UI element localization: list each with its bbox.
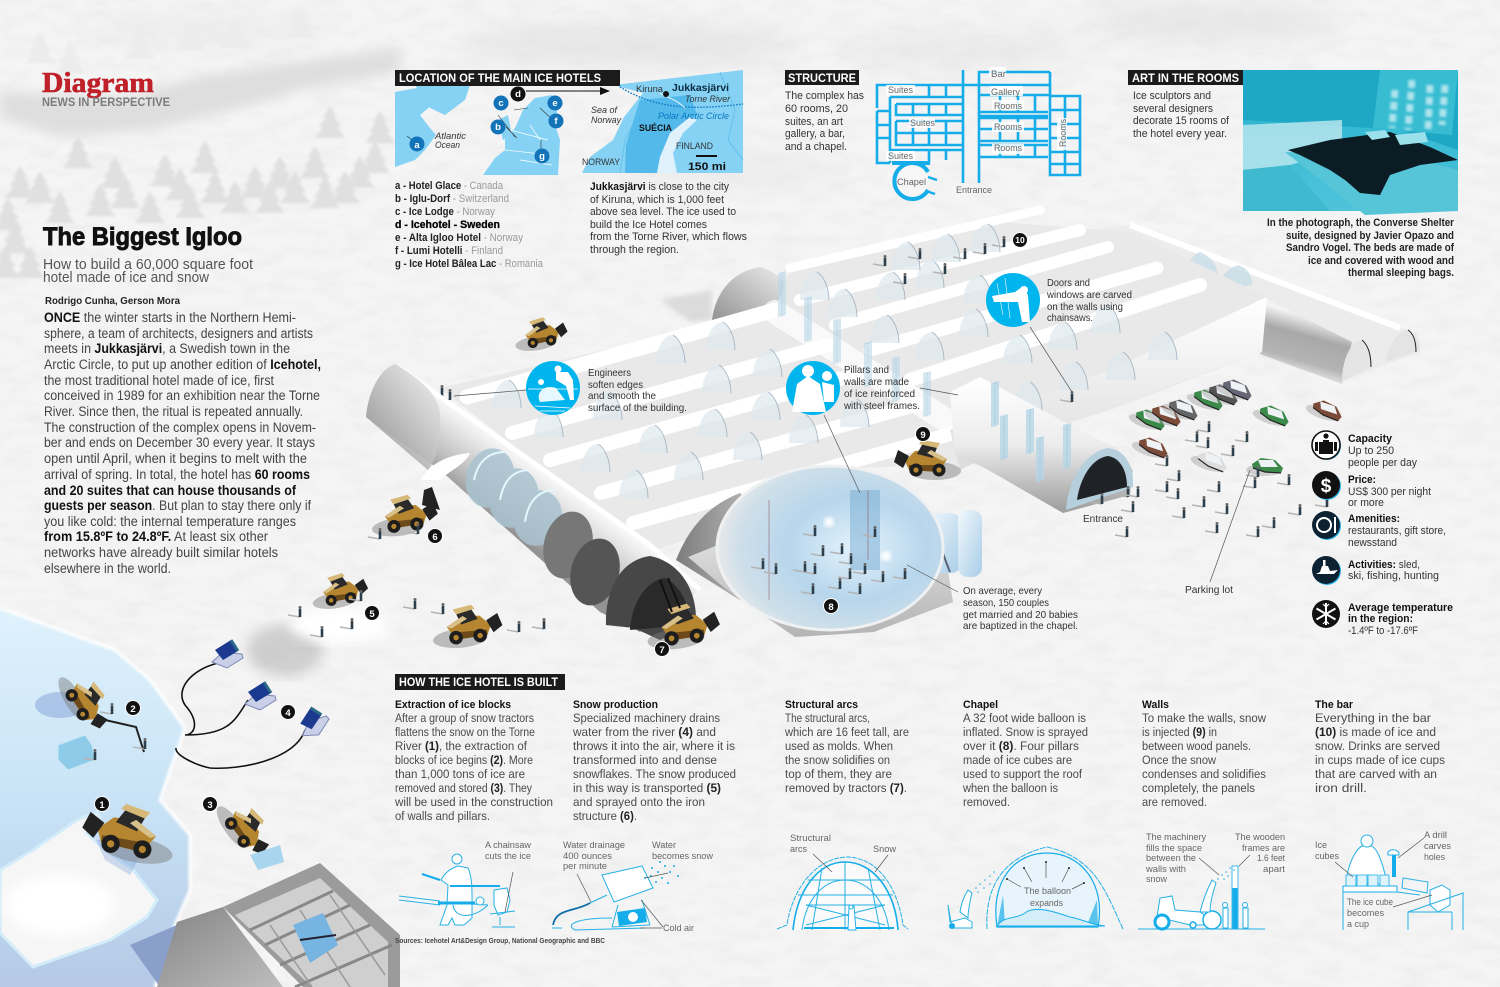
heading: the biggest igloo [43,223,253,307]
column: snow production: water from the river (4) and [572,725,716,739]
drawing: chainsaw cutting ice: cuts the ice [485,851,531,861]
callout: engineers: Engineers [588,368,631,379]
column: extraction: Extraction of ice blocks [395,699,511,711]
drawing: wall machinery: 1.6 feet [1257,853,1285,863]
text block: intro article: guests per season. But plan to stay there only if [44,498,311,513]
column: snow production: throws it into the air, where it is [573,739,735,753]
floor plan: Suites [888,151,913,161]
panel: art in the rooms [1128,70,1458,279]
column: chapel: inflated. Snow is sprayed [963,725,1088,739]
text: price [1348,474,1432,509]
drawing: wall machinery: snow [1146,874,1167,884]
text: price: Price: [1348,474,1376,486]
text: temperature: -1.4ºF to -17.6ºF [1348,625,1418,637]
callout: engineers: surface of the building. [588,403,687,414]
sources: Sources: Icehotel Art&Design Group, National Geographic and BBC [395,936,605,945]
heading: the biggest igloo: The Biggest Igloo [43,223,242,251]
text: capacity [1348,433,1417,469]
text block: intro article: from 15.8ºF to 24.8ºF. At least six other [44,529,269,544]
callout: chapel [963,586,1078,632]
map: scandinavia: NORWAY [582,156,621,167]
map: scandinavia: Sea of [591,104,618,115]
text block: jukkasjarvi: from the Torne River, which flows [590,231,747,243]
map: location markers [410,86,610,164]
drawing: snow cannon: Water [652,840,676,850]
icon: amenities [1312,511,1341,540]
column: chapel: when the balloon is [962,781,1058,795]
photo caption: thermal sleeping bags. [1348,267,1454,279]
drawing: structural arcs [777,833,908,930]
number badges: 10 [1015,235,1025,245]
column: walls: To make the walls, snow [1142,711,1266,725]
ice block pit [157,863,400,987]
drawing: ice bar [1315,830,1463,930]
map: scandinavia: Kiruna [636,83,664,94]
drawing: ice bar: A drill [1424,830,1447,840]
number badges: 7 [659,645,665,656]
drawing: ice bar: carves [1424,841,1451,851]
panel: how the ice hotel is built [394,674,1463,945]
map: location markers: g [539,151,545,162]
column: chapel: Chapel [963,699,998,711]
photo caption [1267,217,1455,279]
building: entrance tunnel [950,377,1133,513]
text block: intro article: ber and ends on December 30 every year. It stays [44,435,315,450]
heading: location: LOCATION OF THE MAIN ICE HOTELS [399,71,601,85]
callout: pillars [786,361,920,415]
panel: structure [785,67,1080,199]
column: snow production: transformed into and dense [573,753,717,767]
text block: structure: and a chapel. [785,141,847,153]
map: location markers: b [495,122,501,133]
callout: engineers [526,361,687,415]
label: entrance: Entrance [1083,514,1123,525]
floor plan: Bar [991,69,1006,79]
drawing: wall machinery: fills the space [1146,843,1202,853]
drawing: ice bar: becomes [1347,908,1384,918]
text block: intro article: you like cold: the internal temperature ranges [44,514,296,529]
callout: doors and windows [986,273,1132,327]
panel: location map: Ocean [435,139,460,150]
drawing: structural arcs: Snow [873,844,896,854]
snow mound shading [247,607,390,676]
column: structural arcs: the snow solidifies on [785,753,890,767]
callout: chapel: On average, every [963,586,1043,597]
column: structural arcs: removed by tractors (7). [785,781,907,795]
legend: ice hotels list: a - Hotel Glace - Canada [395,180,503,192]
text block: structure: gallery, a bar, [785,128,845,140]
heading: art: ART IN THE ROOMS [1132,71,1239,85]
drawing: snow cannon: 400 ounces [563,851,612,861]
callout: doors and windows: Doors and [1047,278,1090,289]
room arches [430,224,1177,498]
drawing: ice bar: holes [1424,852,1445,862]
number badges: 3 [207,800,213,811]
icon: temperature [1312,600,1340,628]
text block: art: the hotel every year. [1133,128,1227,140]
callout: pillars: of ice reinforced [844,389,915,400]
drawing: wall machinery: frames are [1242,843,1285,853]
text block: structure: The complex has [785,90,864,102]
heading: the biggest igloo: How to build a 60,000 square foot [43,257,253,273]
floor plan: Suites [888,85,913,95]
drawing: balloon chapel [948,847,1123,929]
text: activities [1348,559,1439,582]
text block: intro article: elsewhere in the world. [44,561,171,576]
parking lot with cars [1127,375,1345,476]
callout: chapel: get married and 20 babies [963,610,1078,621]
text block: jukkasjarvi: above sea level. The ice used to [590,206,736,218]
column: snow production: and sprayed onto the iron [573,795,705,809]
text: activities: ski, fishing, hunting [1348,570,1439,582]
drawing: wall machinery [1138,832,1285,929]
floor plan: Rooms [1058,119,1068,147]
drawing: wall machinery: The wooden [1235,832,1285,842]
drawing: structural arcs: Structural [790,833,831,843]
heading: how it is built: HOW THE ICE HOTEL IS BUILT [399,675,559,689]
column: the bar: Everything in the bar [1315,711,1431,725]
column: walls: between wood panels. [1142,739,1251,753]
drawing: snow cannon: per minute [563,861,607,871]
title: Diagram: NEWS IN PERSPECTIVE [42,96,170,109]
map: scandinavia: Polar Arctic Circle [658,110,729,121]
column: snow production [572,699,736,823]
drawing: ice bar: Ice [1315,840,1327,850]
heading: the biggest igloo: hotel made of ice and snow [43,270,209,286]
callout: pillars: with steel frames. [843,401,920,412]
column: snow production: Specialized machinery drains [573,711,720,725]
text block: jukkasjarvi: through the region. [590,244,679,256]
map: scandinavia: Torne River [685,93,731,104]
heading: structure: STRUCTURE [788,71,856,85]
photo caption: ice and covered with wood and [1308,255,1454,267]
building: rear right wing [1075,225,1420,384]
tractors near tunnel [288,314,570,650]
drawing: balloon chapel: expands [1030,898,1063,908]
heading: the biggest igloo: Rodrigo Cunha, Gerson Mora [45,295,180,307]
legend: ice hotels list [395,180,543,270]
drawing: wall machinery: apart [1263,864,1285,874]
callout lines [454,327,1250,592]
ice island [0,812,157,967]
text block: structure [785,90,864,153]
legend: ice hotels list: e - Alta Igloo Hotel - Norway [395,232,524,244]
map: location markers: c [498,98,504,109]
drawing: balloon chapel: The balloon [1024,886,1071,896]
column: extraction: flattens the snow on the Torne [395,725,535,739]
column: the bar: in cups made of ice cups [1315,753,1445,767]
column: chapel: used to support the roof [963,767,1083,781]
map: scandinavia: 150 mi [688,161,726,173]
text block: intro article: conceived in 1989 for an exhibition near the Torne [44,388,320,403]
number badges: 5 [369,609,375,620]
column: extraction: will be used in the construction [394,795,553,809]
text block: structure: 60 rooms, 20 [785,103,848,115]
building: chapel dome [676,466,982,637]
drawing: ice bar: a cup [1347,919,1369,929]
column: extraction: of walls and pillars. [395,809,490,823]
dome pods [925,510,982,577]
tractors at river [35,663,284,870]
column: snow production: structure (6). [573,809,637,823]
legend: ice hotels list: b - Iglu-Dorf - Switzerland [395,193,509,205]
column: extraction: than 1,000 tons of ice are [395,767,525,781]
drawing: wall machinery: The machinery [1146,832,1206,842]
drawing: snow cannon [552,840,713,933]
column: walls: condenses and solidifies [1142,767,1266,781]
map: location markers: d [515,89,521,100]
panel: location map [395,70,743,175]
column: structural arcs: used as molds. When [785,739,893,753]
drawing: chainsaw cutting ice: A chainsaw [485,840,531,850]
floor plan: Chapel [897,177,926,187]
drawing: ice bar: cubes [1315,851,1339,861]
callout: doors and windows: on the walls using [1047,302,1123,313]
floor plan: Rooms [994,122,1022,132]
text block: intro article: Arctic Circle, to put up another edition of Icehotel, [44,357,321,372]
column: chapel: removed. [963,795,1010,809]
number badges: 2 [130,704,136,715]
text: amenities [1348,513,1446,549]
photo: ice suite [1243,70,1458,215]
callout: chapel: are baptized in the chapel. [963,621,1078,632]
drawing: wall machinery: between the [1146,853,1196,863]
drawing: chainsaw cutting ice [399,840,531,927]
column: walls: Walls [1142,699,1169,711]
building: rear barrel cap [660,267,790,325]
map: location markers: f [554,116,558,127]
drawing: snow cannon: Cold air [663,923,694,933]
text block: intro article: open until April, when it begins to melt with the [44,451,307,466]
text block: art: decorate 15 rooms of [1133,115,1230,127]
river water [0,608,190,987]
callout: engineers: soften edges [588,380,643,391]
text block: intro article [44,310,321,576]
text block: intro article: ONCE the winter starts in the Northern Hemi- [44,310,296,325]
map: scandinavia: Norway [591,114,622,125]
column: extraction: removed and stored (3). They [395,781,533,795]
column: the bar: (10) is made of ice and [1315,725,1436,739]
column: walls: are removed. [1142,795,1207,809]
text block: art [1133,90,1230,140]
map: scandinavia: FINLAND [676,140,713,151]
chapel ring [892,163,937,199]
panel: location map: Atlantic [434,130,466,141]
callout: doors and windows: windows are carved [1046,290,1132,301]
title: Diagram [42,68,170,109]
photo caption: suite, designed by Javier Opazo and [1286,230,1454,242]
column: walls: completely, the panels [1142,781,1255,795]
floor plan [877,67,1080,199]
map: connectors [407,103,563,154]
label: parking lot: Parking lot [1185,585,1233,596]
text: capacity: Up to 250 [1348,445,1394,457]
column: chapel: over it (8). Four pillars [963,739,1079,753]
background: foggy forest [0,6,1340,278]
column: structural arcs: Structural arcs [785,699,858,711]
drawing: snow cannon: Water drainage [563,840,625,850]
number badges: 9 [920,430,926,441]
column: the bar: that are carved with an [1315,767,1437,781]
text: amenities: newsstand [1348,537,1397,549]
text: activities: Activities: sled, [1348,559,1420,571]
map: scandinavia: SUÉCIA [639,123,672,133]
text block: jukkasjarvi: Jukkasjärvi is close to the city [590,181,729,193]
text: price: or more [1348,497,1384,509]
text block: jukkasjarvi: build the Ice Hotel comes [590,219,707,231]
text block: intro article: River. Since then, the ritual is repeated annually. [44,404,303,419]
column: the bar: iron drill. [1315,781,1367,795]
floor plan: Rooms [994,143,1022,153]
floor plan: Suites [910,118,935,128]
text: temperature: Average temperature [1348,602,1453,614]
column: extraction: River (1), the extraction of [395,739,528,753]
column: the bar [1315,699,1445,795]
photo caption: In the photograph, the Converse Shelter [1267,217,1455,229]
text block: intro article: The construction of the complex opens in Novem- [44,420,316,435]
icon: price: $ [1321,476,1332,497]
number badges: 1 [99,800,105,811]
text: capacity: Capacity [1348,433,1392,445]
text block: intro article: arrival of spring. In total, the hotel has 60 rooms [44,467,310,482]
number badges: 4 [285,708,291,719]
text block: art: several designers [1133,103,1213,115]
map: scandinavia: Jukkasjärvi [672,82,729,94]
icon: price [1312,471,1341,500]
callout: pillars: Pillars and [844,365,889,376]
drawing: wall machinery: walls with [1145,864,1186,874]
title: Diagram: Diagram [42,68,154,99]
column: snow production: snowflakes. The snow produced [573,767,736,781]
column: walls: Once the snow [1142,753,1216,767]
column: snow production: in this way is transported (5) [573,781,721,795]
building: main roof with room barrels [440,210,1267,552]
text block: intro article: and 20 suites that can house thousands of [44,483,296,498]
text: amenities: Amenities: [1348,513,1400,525]
text block: intro article: the most traditional hotel made of ice, first [44,373,274,388]
column: structural arcs: The structural arcs, [785,711,870,725]
column: structural arcs: top of them, they are [785,767,892,781]
column: chapel: made of ice cubes are [963,753,1072,767]
map: europe and north atlantic [395,85,560,175]
tractors at dome [644,440,961,652]
column: walls: is injected (9) in [1142,725,1217,739]
building: left tunnel [366,364,700,640]
legend: ice hotels list: c - Ice Lodge - Norway [395,206,496,218]
map: scandinavia [582,70,743,173]
text block: art: Ice sculptors and [1133,90,1211,102]
text: temperature: in the region: [1348,613,1413,625]
callout: pillars: walls are made [843,377,909,388]
text block: jukkasjarvi [590,181,747,256]
text block: intro article: sphere, a team of architects, designers and artists [44,326,313,341]
legend: ice hotels list: d - Icehotel - Sweden [395,219,500,231]
text block: structure: suites, an art [785,116,844,128]
icon: activities [1312,556,1341,585]
text block: intro article: networks have already built similar hotels [44,545,278,560]
number badges: 6 [432,532,438,543]
legend: ice hotels list: f - Lumi Hotelli - Finland [395,245,503,257]
legend: ice hotels list: g - Ice Hotel Bâlea Lac - Romania [395,258,543,270]
column: the bar: The bar [1315,699,1354,711]
column: chapel: A 32 foot wide balloon is [963,711,1086,725]
drawing: snow cannon: becomes snow [652,851,713,861]
visitors [1090,421,1328,537]
callout: chapel: season, 150 couples [963,598,1049,609]
text: temperature [1348,602,1453,637]
column: chapel [962,699,1088,809]
column: extraction: After a group of snow tractors [395,711,534,725]
text block: intro article: meets in Jukkasjärvi, a Swedish town in the [44,341,290,356]
text: price: US$ 300 per night [1348,486,1432,498]
column: structural arcs: which are 16 feet tall, are [784,725,909,739]
drawing: structural arcs: arcs [790,844,807,854]
drawing: ice bar: The ice cube [1347,897,1393,907]
icon: capacity [1312,431,1341,460]
photo caption: Sandro Vogel. The beds are made of [1286,242,1454,254]
floor plan: Rooms [994,101,1022,111]
column: structural arcs [784,699,909,795]
column: extraction [394,699,553,823]
text: amenities: restaurants, gift store, [1348,525,1446,537]
panel: key facts [1312,431,1453,637]
map: location markers: e [552,98,558,109]
number badges [94,232,1028,812]
floor plan: Entrance [956,185,992,195]
number badges: 8 [828,602,834,613]
text block: jukkasjarvi: of Kiruna, which is 1,000 feet [590,194,725,206]
column: walls [1142,699,1266,809]
callout: doors and windows: chainsaws. [1047,313,1093,324]
map: location markers: a [414,140,420,151]
snow cannons and hoses [176,640,333,768]
callout: engineers: and smooth the [588,391,656,402]
column: the bar: snow. Drinks are served [1315,739,1440,753]
column: snow production: Snow production [573,699,658,711]
text: capacity: people per day [1348,457,1417,469]
floor plan: Gallery [991,87,1020,97]
column: extraction: blocks of ice begins (2). More [395,753,533,767]
